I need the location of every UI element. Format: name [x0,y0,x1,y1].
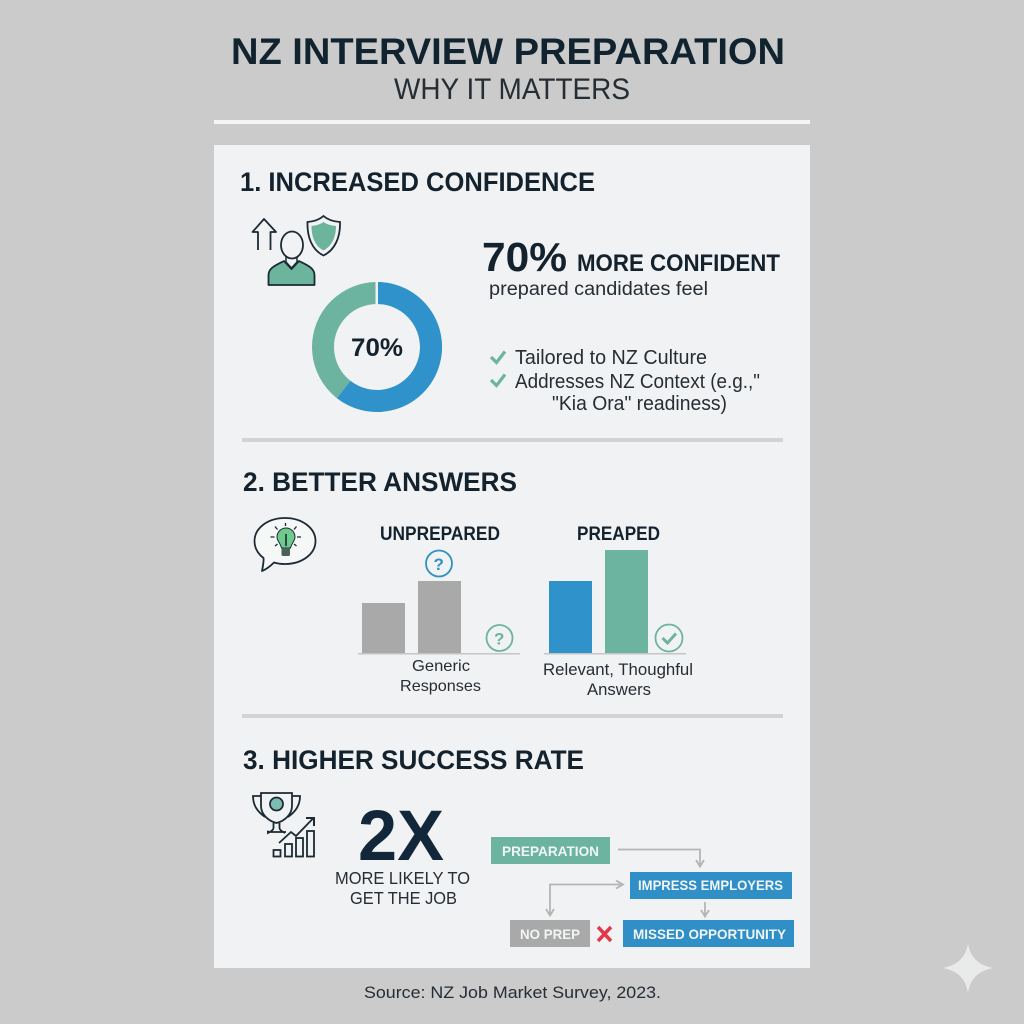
stat: 70% more confident [482,234,780,300]
stat: 70% more confident: MORE CONFIDENT [577,250,780,277]
checklist: "Kia Ora" readiness) [552,393,727,415]
arrow: preparation to impress employers [618,850,704,866]
flow diagram [491,837,794,947]
icon: speech bubble with light bulb [254,518,316,571]
icon: blue question mark [426,550,452,576]
panel: better answers [243,467,693,699]
chart: prepared: Relevant, Thoughful [543,660,693,679]
panel: higher success rate [243,745,794,947]
icon: sparkle [943,943,993,993]
box: missed opportunity [623,920,794,947]
chart: prepared [543,524,693,699]
donut chart 70% [323,281,431,401]
box: no prep: NO PREP [520,926,580,942]
chart: unprepared: Generic [412,658,470,675]
stat: 2X: GET THE JOB [350,888,457,908]
stat: 70% more confident: 70% [482,234,567,280]
checklist: Addresses NZ Context (e.g.," [515,371,760,393]
chart: prepared: Answers [587,680,651,699]
stat: 2X: MORE LIKELY TO [335,868,470,888]
icon: green check [656,624,682,652]
panel: increased confidence [240,167,780,415]
icon: person with arrow and shield [252,216,340,285]
checklist [491,347,760,415]
source note: Source: NZ Job Market Survey, 2023. [364,984,661,1002]
title: WHY IT MATTERS [394,73,630,106]
title: NZ INTERVIEW PREPARATION [231,31,785,72]
arrow: impress employers to missed opportunity [701,902,709,916]
box: preparation [491,837,610,864]
arrow: no prep to impress employers [546,880,623,916]
stat: 2X [335,797,470,908]
icon: trophy and growth chart [253,793,314,856]
box: impress employers [630,872,792,899]
chart: unprepared: Responses [400,678,481,695]
box: preparation: PREPARATION [502,843,599,859]
chart: prepared: PREAPED [577,524,660,545]
stat: 2X: 2X [358,797,444,876]
main panel [214,145,810,968]
chart: unprepared: UNPREPARED [380,524,500,545]
icon: blue question mark: ? [434,555,444,574]
heading: higher success rate: 3. HIGHER SUCCESS RATE [243,745,584,775]
box: missed opportunity: MISSED OPPORTUNITY [633,926,787,942]
checklist: Tailored to NZ Culture [515,347,707,369]
donut chart 70%: 70% [351,334,403,362]
heading: increased confidence: 1. INCREASED CONFIDENCE [240,167,595,197]
stat: 70% more confident: prepared candidates feel [489,279,708,300]
title [231,31,785,106]
icon: red cross [598,927,611,941]
icon: green question mark [486,625,512,651]
box: no prep [510,920,590,947]
box: impress employers: IMPRESS EMPLOYERS [638,877,783,893]
chart: unprepared [358,524,520,695]
icon: green question mark: ? [494,630,504,648]
heading: better answers: 2. BETTER ANSWERS [243,467,517,497]
